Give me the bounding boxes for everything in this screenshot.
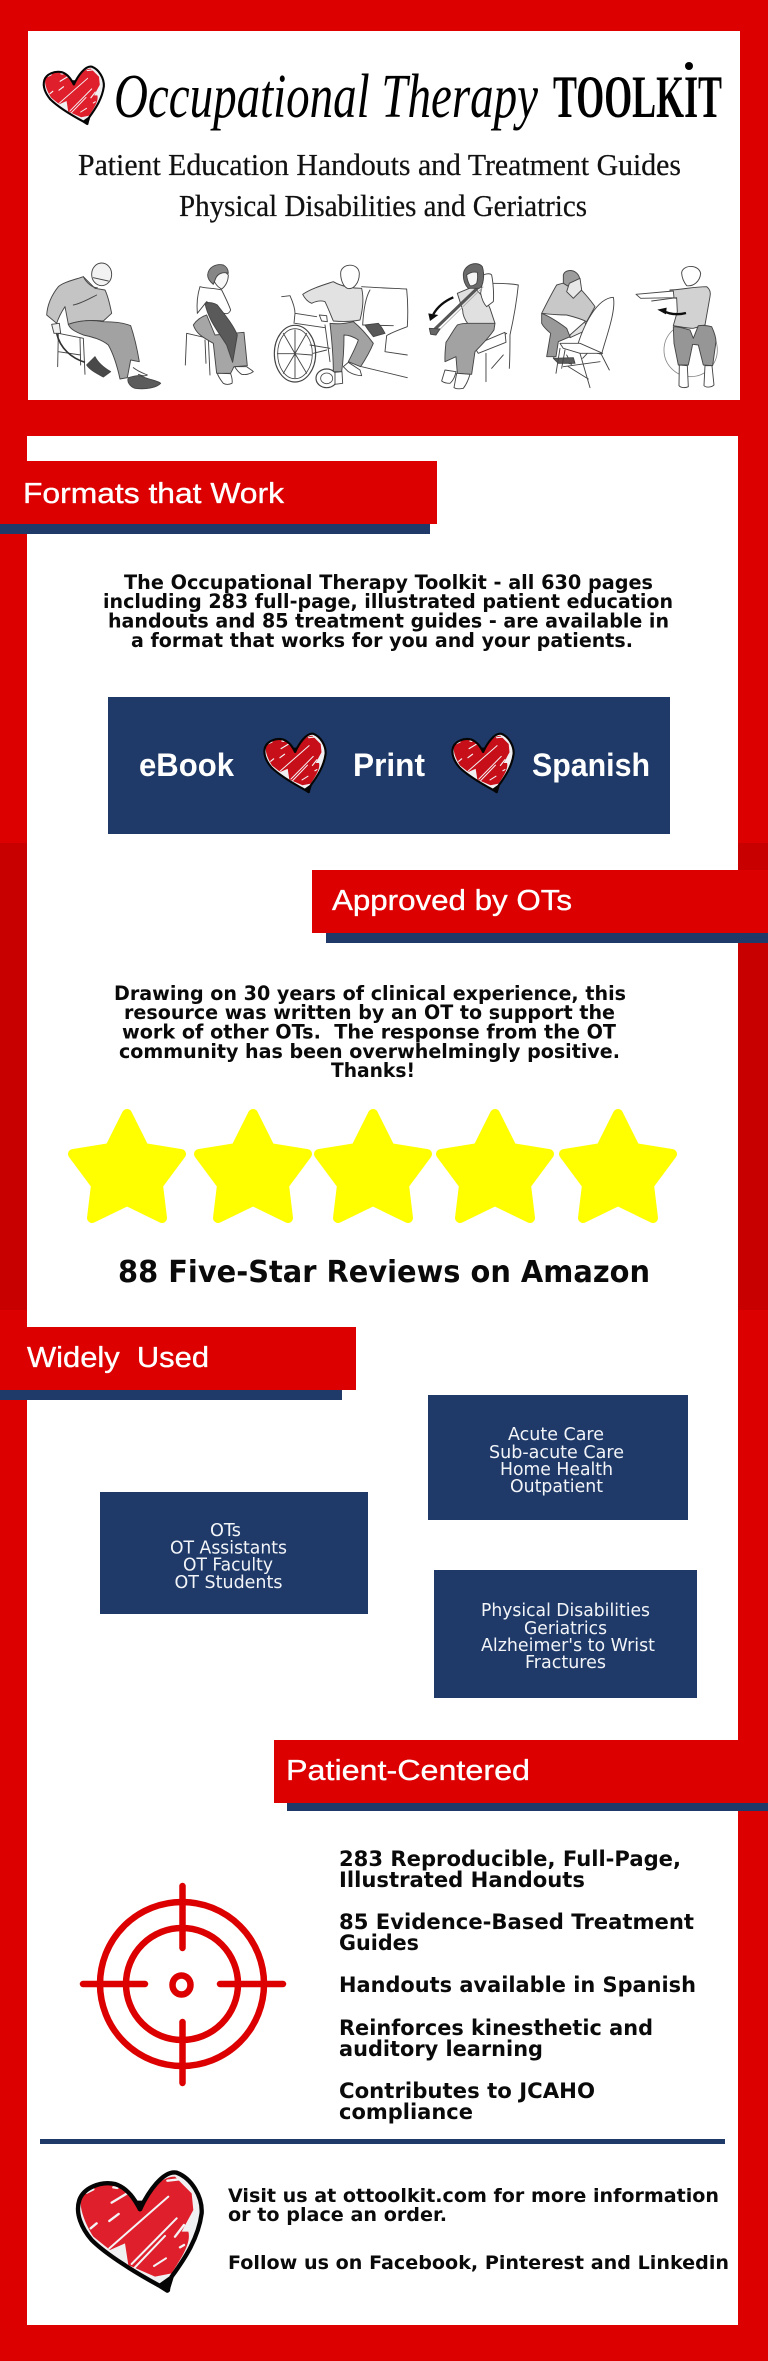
subtitle line 2: Physical Disabilities and Geriatrics xyxy=(179,188,587,223)
panel: users: OT Students xyxy=(174,1573,282,1593)
heading: reviews: 88 Five-Star Reviews on Amazon xyxy=(118,1255,650,1290)
panel: conditions: Geriatrics xyxy=(524,1619,607,1639)
panel: settings: Outpatient xyxy=(510,1477,603,1497)
section banner: Formats that Work xyxy=(0,461,437,534)
panel: header xyxy=(28,31,740,400)
illustration: man with reacher and sock aid, woman with cardigan xyxy=(47,263,253,389)
panel: settings: Acute Care xyxy=(508,1425,604,1445)
text block: contact xyxy=(228,2185,729,2274)
text block: contact: Follow us on Facebook, Pinterest and Linkedin xyxy=(228,2252,729,2274)
list: patient-centered features: auditory learning xyxy=(339,2037,543,2062)
panel: conditions: Alzheimer's to Wrist xyxy=(481,1636,655,1656)
panel: main content xyxy=(27,436,738,2325)
text block: approval description: community has been overwhelmingly positive. xyxy=(119,1040,620,1063)
list: patient-centered features: 85 Evidence-Based Treatment xyxy=(339,1910,694,1935)
list: patient-centered features: Illustrated Handouts xyxy=(339,1868,585,1893)
panel: settings: Sub-acute Care xyxy=(489,1443,624,1463)
list: patient-centered features: 283 Reproducible, Full-Page, xyxy=(339,1847,681,1872)
section banner: Widely Used xyxy=(0,1327,356,1400)
text block: formats description: handouts and 85 treatment guides - are available in xyxy=(108,610,669,632)
illustration: transfer from wheelchair to sofa, woman with exercise band xyxy=(274,264,518,389)
text block: approval description: Thanks! xyxy=(331,1059,415,1082)
list: patient-centered features: Guides xyxy=(339,1931,419,1956)
icon: heart xyxy=(452,734,514,793)
list: patient-centered features: Reinforces kinesthetic and xyxy=(339,2016,653,2041)
text block: approval description: resource was written by an OT to support the xyxy=(124,1001,615,1024)
panel: settings: Home Health xyxy=(500,1460,613,1480)
panel: conditions: Physical Disabilities xyxy=(481,1601,650,1621)
section banner: Approved by OTs: Approved by OTs xyxy=(332,885,572,917)
text block: formats description: The Occupational Therapy Toolkit - all 630 pages xyxy=(124,571,653,594)
list: patient-centered features: Handouts available in Spanish xyxy=(339,1973,696,1998)
section banner: Approved by OTs xyxy=(312,870,768,943)
text block: contact: Visit us at ottoolkit.com for more information xyxy=(228,2185,719,2207)
text block: approval description: work of other OTs. The response from the OT xyxy=(122,1020,617,1044)
panel: users: OT Assistants xyxy=(170,1538,287,1558)
section banner: Patient-Centered: Patient-Centered xyxy=(286,1755,530,1787)
rating: five stars xyxy=(73,1114,672,1218)
label: Spanish: Spanish xyxy=(532,747,650,783)
text block: formats description: a format that works for you and your patients. xyxy=(131,629,633,652)
section banner: Patient-Centered xyxy=(274,1740,768,1811)
panel: conditions: Fractures xyxy=(525,1653,606,1673)
panel: users xyxy=(100,1492,368,1614)
label: eBook: eBook xyxy=(139,747,234,783)
panel: settings xyxy=(428,1395,688,1520)
panel: conditions xyxy=(434,1570,697,1698)
icon: target crosshair xyxy=(83,1886,283,2083)
text block: approval description: Drawing on 30 years of clinical experience, this xyxy=(114,982,626,1005)
label: Print: Print xyxy=(353,747,425,783)
text block: approval description xyxy=(114,982,626,1082)
list: patient-centered features: Contributes to JCAHO xyxy=(339,2079,595,2104)
subtitle line 1: Patient Education Handouts and Treatment Guides xyxy=(78,147,681,182)
icon: title heart xyxy=(44,67,104,124)
text block: formats description: including 283 full-page, illustrated patient education xyxy=(103,590,673,613)
panel: users: OT Faculty xyxy=(183,1556,273,1576)
icon: footer heart xyxy=(78,2172,202,2292)
panel: users: OTs xyxy=(210,1521,241,1541)
icon: heart xyxy=(264,734,326,793)
list: patient-centered features: compliance xyxy=(339,2100,473,2125)
list: patient-centered features xyxy=(339,1847,696,2125)
title: Occupational Therapy: Occupational Therapy xyxy=(114,63,538,131)
text block: contact: or to place an order. xyxy=(228,2204,447,2226)
panel: available formats xyxy=(108,697,670,834)
section banner: Widely Used: Widely Used xyxy=(27,1342,209,1374)
illustration: caregiver at chair, woman on exercise ball xyxy=(542,266,717,388)
text block: formats description xyxy=(103,571,673,652)
section banner: Formats that Work: Formats that Work xyxy=(23,478,285,510)
